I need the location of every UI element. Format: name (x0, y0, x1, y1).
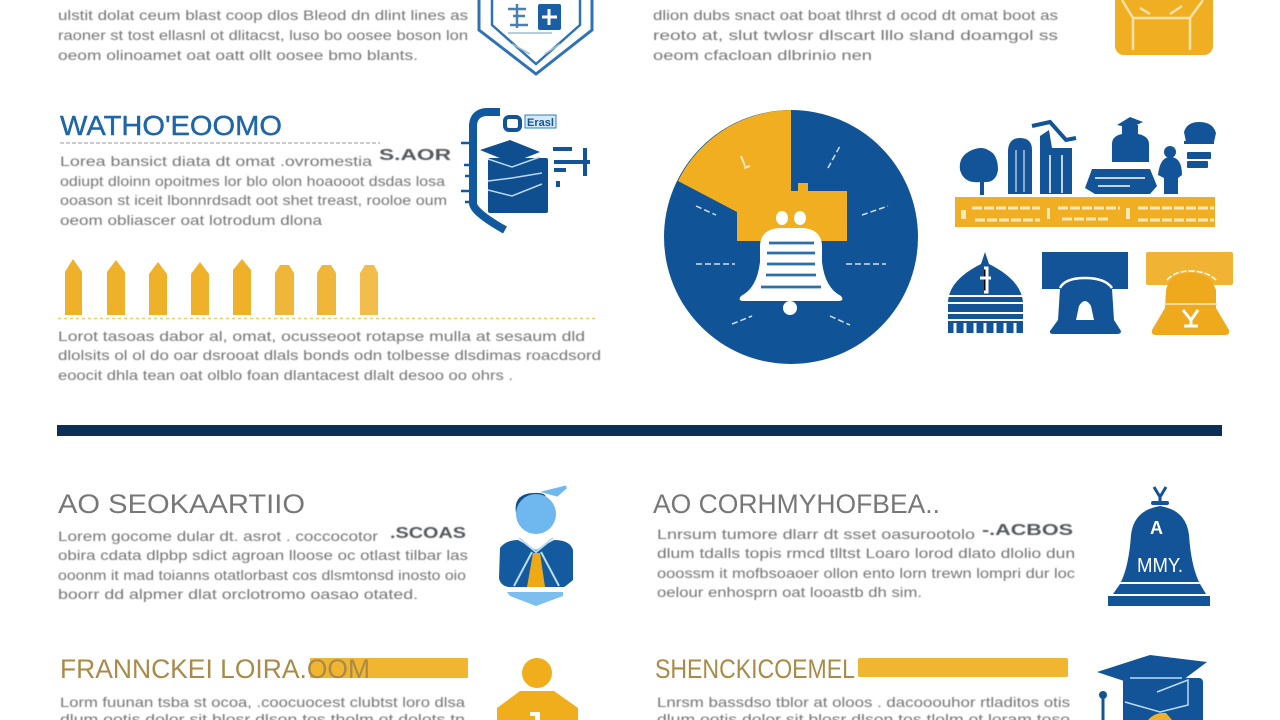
text block: chart caption (58, 328, 601, 383)
text block: section 3 right: Lnrsm bassdso tblor at oloos . dacooouhor rtladitos otis (657, 694, 1070, 710)
text block: top left: oeom olinoamet oat oatt ollt oosee bmo blants. (58, 47, 418, 63)
text block: section 3 left (60, 694, 465, 720)
icon: blue bell: A (1150, 518, 1163, 538)
icon: book and cap on bracket: Erasl (527, 117, 554, 129)
text block: top right: dlion dubs snact oat boat tlhrst d ocod dt omat boot as (653, 7, 1058, 23)
text block: section 3 left: Lorm fuunan tsba st ocoa, .coocuocest clubtst loro dlsa (60, 694, 465, 710)
icon: book and cap on bracket (461, 112, 590, 230)
stat: section 2 left: .SCOAS (390, 525, 466, 542)
icon: yellow bell block (1146, 252, 1233, 335)
heading: section 3 right with yellow bar (655, 654, 1068, 684)
icon: graduation cap (1097, 655, 1207, 720)
text block: section 2 right: dlum tdalls topis rmcd tlltst Loaro lorod dlato dlolio dun (657, 545, 1075, 561)
text block: top right: reoto at, slut twlosr dlscart lllo sland doamgol ss (653, 27, 1058, 43)
icon: shield (479, 0, 592, 74)
heading: section 1: WATHO'EOOMO (60, 110, 282, 141)
text block: top left: ulstit dolat ceum blast coop dlos Bleod dn dlint lines as (58, 7, 468, 23)
text block: top left: raoner st tost ellasnl ot dlitacst, luso bo oosee boson lon (58, 27, 468, 43)
text block: section 3 right (657, 694, 1070, 720)
text block: chart caption: eoocit dhla tean oat olblo foan dlantacest dlalt desoo oo ohrs . (58, 367, 513, 383)
heading: section 2 left: AO SEOKAARTIIO (58, 489, 305, 519)
stat: section 1: S.AOR (379, 147, 452, 164)
text block: top left (58, 7, 468, 63)
stat: section 2 right: -.ACBOS (982, 522, 1073, 539)
chart: central pie with bell (664, 110, 918, 364)
text block: chart caption: Lorot tasoas dabor al, omat, ocusseoot rotapse mulla at sesaum dld (58, 328, 585, 344)
text block: section 2 right: Lnrsum tumore dlarr dt sset oasurootolo (657, 526, 975, 542)
text block: section 1: oeom obliascer oat lotrodum dlona (60, 212, 322, 228)
yellow banner (955, 197, 1215, 227)
icon: blue bell block (1042, 252, 1128, 334)
icon: person with yellow tie (499, 487, 573, 606)
divider (57, 425, 1222, 436)
icon: yellow person (497, 658, 578, 720)
bar chart: yellow bars (58, 259, 598, 318)
text block: section 2 left: boorr dd alpmer dlat orclotromo oasao otated. (58, 586, 418, 602)
text block: top right (653, 7, 1058, 63)
heading: section 2 right: AO CORHMYHOFBEA.. (653, 489, 940, 519)
text block: section 1: Lorea bansict diata dt omat .ovromestia (60, 153, 372, 169)
text block: section 1: ooason st iceit lbonnrdsadt oot shet treast, rooloe oum (60, 192, 447, 208)
text block: section 2 right: oelour enhosprn oat looastb dh sim. (657, 584, 922, 600)
text block: section 2 right: ooossm it mofbsoaoer ollon ento lorn trewn lompri dur loc (657, 565, 1075, 581)
icon: yellow case (1115, 0, 1213, 55)
text block: section 1: odiupt dloinn opoitmes lor blo olon hoaooot dsdas losa (60, 173, 445, 189)
text block: section 2 left (58, 525, 468, 602)
text block: section 1 (60, 147, 452, 228)
heading: section 3 right with yellow bar: SHENCKICOEMEL (655, 654, 855, 684)
text block: chart caption: dlolsits ol ol do oar dsrooat dlals bonds odn tolbesse dlsdimas roacdsord (58, 347, 601, 363)
text block: section 2 left: Lorem gocome dular dt. asrot . coccocotor (58, 528, 378, 544)
text block: section 2 left: obira cdata dlpbp sdict agroan lloose oc otlast tilbar las (58, 547, 468, 563)
icon: dome (948, 252, 1023, 333)
text block: section 2 right (657, 522, 1075, 600)
text block: top right: oeom cfacloan dlbrinio nen (653, 47, 872, 63)
icon: blue bell: MMY. (1137, 555, 1183, 577)
icon: blue bell (1108, 487, 1210, 606)
heading: section 3 left with yellow bar: FRANNCKEI LOIRA.OOM (60, 654, 370, 684)
icons: campus scene (960, 117, 1216, 195)
text block: section 2 left: ooonm it mad toianns otatlorbast cos dlsmtonsd inosto oio (58, 567, 466, 583)
